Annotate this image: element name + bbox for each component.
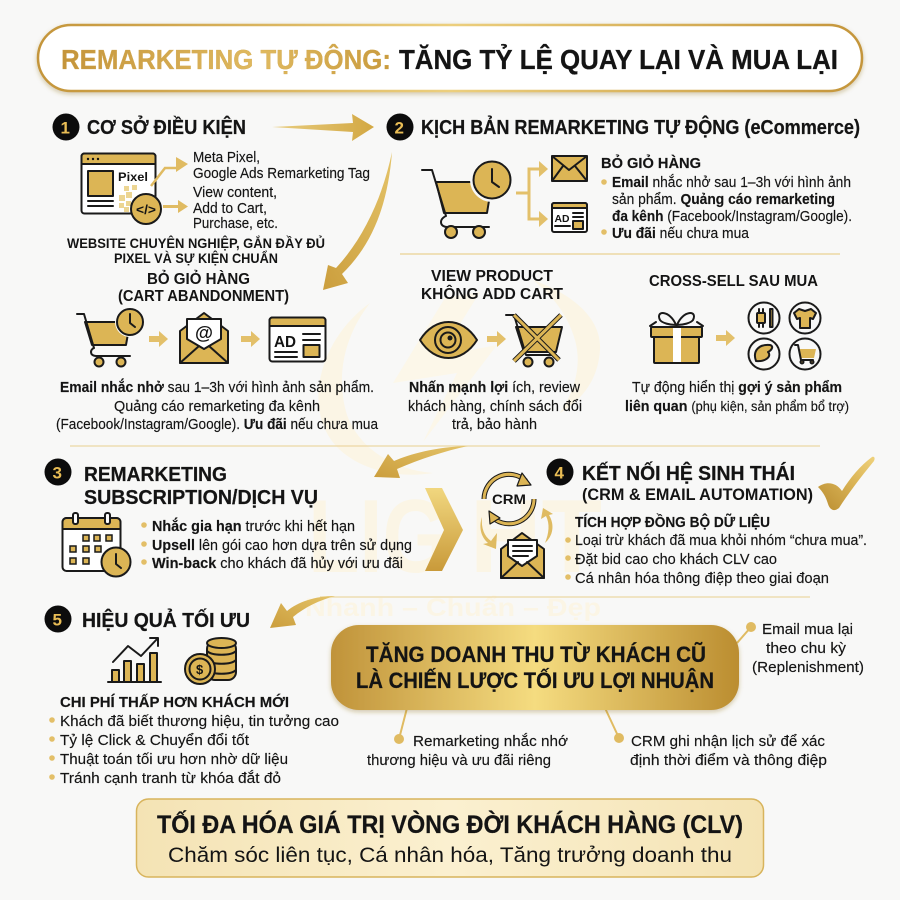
icon: CRM cycle [484, 473, 534, 524]
text: cart abandonment bullets: sản phẩm. Quảng cáo remarketing [612, 191, 835, 208]
arrow: pixel to meta tag [151, 168, 178, 186]
icon: cart with clock [77, 307, 145, 366]
icon: envelope [552, 156, 587, 181]
arrow: cart to email [149, 331, 168, 347]
section 1 heading: 1 [60, 118, 70, 138]
text: data integration bullets: Loại trừ khách đã mua khỏi nhóm “chưa mua”. [575, 532, 867, 549]
icon: gold check mark [818, 457, 875, 510]
footer banner: maximize CLV: TỐI ĐA HÓA GIÁ TRỊ VÒNG ĐỜI KHÁCH HÀNG (CLV) [157, 809, 743, 839]
arrow: step 1 to step 2 [272, 114, 374, 141]
section 4 heading: (CRM & EMAIL AUTOMATION) [582, 485, 813, 504]
text: lower cost bullets [49, 693, 339, 787]
arrow: gift to products [716, 330, 735, 346]
text: cart abandonment description: (Facebook/Instagram/Google). Ưu đãi nếu chưa mua [56, 416, 379, 433]
text: pixel tags: Meta Pixel, [193, 149, 260, 166]
arrow: email to ad [241, 331, 260, 347]
icon: growth chart [108, 638, 161, 682]
heading: view product: VIEW PRODUCT [431, 268, 554, 285]
text: cross-sell description: liên quan (phụ kiện, sản phẩm bổ trợ) [625, 398, 849, 415]
icon: small ad window [552, 203, 587, 232]
section 2 heading: 2 [394, 118, 404, 138]
icon: t-shirt [790, 302, 820, 334]
callout: CRM history: định thời điểm và thông điệp [630, 752, 827, 769]
icon: large cart with clock [422, 158, 514, 238]
text: cart abandonment description: Email nhắc nhở sau 1–3h với hình ảnh sản phẩm. [60, 378, 374, 396]
text: data integration bullets [565, 513, 867, 587]
section 1 heading [52, 114, 246, 140]
text: pixel tags: Google Ads Remarketing Tag [193, 165, 370, 182]
text: view product description: Nhấn mạnh lợi ích, review [409, 379, 580, 396]
icon: website with pixel: Pixel [118, 172, 148, 184]
icon: coins: $ [196, 662, 204, 677]
text: cart abandonment bullets: Ưu đãi nếu chưa mua [612, 225, 750, 242]
text: pixel tags: Add to Cart, [193, 200, 267, 217]
section 3 heading [44, 458, 318, 509]
text: lower cost bullets: CHI PHÍ THẤP HƠN KHÁCH MỚI [60, 693, 289, 711]
callout connectors [394, 622, 756, 744]
text: view product description: khách hàng, chính sách đổi [408, 398, 582, 415]
watermark logo: LIG [308, 479, 448, 595]
section 5 heading [44, 606, 250, 632]
title banner [38, 25, 862, 91]
footer banner: maximize CLV [136, 799, 764, 877]
icon: website with pixel: </> [136, 202, 156, 217]
text: data integration bullets: Cá nhân hóa thông điệp theo giai đoạn [575, 570, 829, 587]
heading: cross-sell: CROSS-SELL SAU MUA [649, 273, 818, 290]
callout: replenishment email: Email mua lại [762, 621, 853, 638]
arrow: envelope to CRM [541, 508, 553, 543]
section 4 heading: 4 [554, 464, 564, 482]
text: view product description [408, 379, 582, 433]
section 3 heading: SUBSCRIPTION/DỊCH VỤ [84, 486, 318, 509]
section 4 heading [546, 458, 813, 504]
title banner: TĂNG TỶ LỆ QUAY LẠI VÀ MUA LẠI [399, 43, 838, 75]
icon: accessory [748, 338, 780, 370]
callout banner: revenue from existing customers: LÀ CHIẾN LƯỢC TỐI ƯU LỢI NHUẬN [356, 667, 714, 693]
heading: cart abandonment: BỎ GIỎ HÀNG [147, 270, 250, 288]
logo chevron [425, 488, 463, 571]
callout: CRM history [630, 733, 827, 769]
text: website caption: PIXEL VÀ SỰ KIỆN CHUẨN [114, 251, 278, 266]
watermark logo: HT [470, 479, 602, 595]
text: cart abandonment bullets: đa kênh (Facebook/Instagram/Google). [612, 208, 852, 225]
callout: remarketing reminder [367, 733, 568, 769]
section 3 heading: 3 [52, 464, 62, 482]
text: lower cost bullets: Tránh cạnh tranh từ khóa đắt đỏ [60, 770, 281, 787]
text: cart abandonment description: Quảng cáo remarketing đa kênh [114, 398, 320, 415]
icon: small ad window: AD [554, 213, 570, 225]
watermark logo: Nhanh – Chuẩn – Đẹp [305, 594, 601, 622]
text: subscription bullets: Nhắc gia hạn trước khi hết hạn [152, 517, 355, 535]
callout: replenishment email: theo chu kỳ [766, 640, 847, 657]
callout banner: revenue from existing customers: TĂNG DOANH THU TỪ KHÁCH CŨ [366, 642, 706, 667]
text: cross-sell description: Tự động hiển thị gợi ý sản phẩm [632, 379, 842, 396]
text: lower cost bullets: Khách đã biết thương hiệu, tin tưởng cao [60, 713, 339, 730]
text: cart abandonment description [56, 378, 379, 433]
text: cross-sell description [625, 379, 849, 415]
title banner: REMARKETING TỰ ĐỘNG: [61, 43, 391, 75]
text: website caption [67, 236, 325, 266]
heading: view product: KHÔNG ADD CART [421, 285, 564, 303]
icon: CRM cycle: CRM [492, 492, 526, 507]
heading: cart abandonment: (CART ABANDONMENT) [118, 288, 289, 305]
callout banner: revenue from existing customers [331, 625, 739, 710]
watermark logo [305, 280, 602, 622]
arrow head: pixel to meta tag [176, 157, 188, 172]
text: lower cost bullets: Tỷ lệ Click & Chuyển đổi tốt [60, 732, 250, 749]
curved arrow: step 4 to step 3 [374, 446, 468, 478]
text: cart abandonment bullets [601, 154, 852, 242]
footer banner: maximize CLV: Chăm sóc liên tục, Cá nhân hóa, Tăng trưởng doanh thu [168, 844, 732, 867]
icon: envelope with document [501, 533, 544, 578]
arrow: eye to crossed cart [487, 331, 506, 347]
connector: cart to channels [516, 161, 548, 227]
section 4 heading: KẾT NỐI HỆ SINH THÁI [582, 461, 795, 485]
section 5 heading: 5 [52, 610, 62, 630]
callout: CRM history: CRM ghi nhận lịch sử để xác [631, 733, 825, 750]
arrow: CRM to envelope [480, 517, 497, 549]
text: cart abandonment bullets: Email nhắc nhở sau 1–3h với hình ảnh [612, 174, 851, 191]
icon: ad window [270, 318, 326, 362]
text: lower cost bullets: Thuật toán tối ưu hơn nhờ dữ liệu [60, 751, 288, 768]
text: website caption: WEBSITE CHUYÊN NGHIỆP, GẮN ĐẦY ĐỦ [67, 236, 325, 251]
icon: calendar with clock [62, 513, 130, 576]
icon: watch and accessory [748, 302, 780, 334]
icon: open envelope [180, 313, 228, 363]
icon: website with pixel [82, 154, 161, 224]
callout: remarketing reminder: thương hiệu và ưu đãi riêng [367, 752, 551, 769]
section 3 heading: REMARKETING [84, 463, 227, 486]
text: subscription bullets: Upsell lên gói cao hơn dựa trên sử dụng [152, 537, 412, 554]
callout: replenishment email: (Replenishment) [752, 659, 864, 676]
section 1 heading: CƠ SỞ ĐIỀU KIỆN [87, 115, 246, 139]
icon: small cart [790, 338, 820, 370]
text: pixel tags [193, 149, 370, 232]
heading: view product [421, 268, 564, 303]
curved arrow: to step 5 [270, 596, 335, 628]
text: view product description: trả, bảo hành [452, 416, 537, 433]
text: data integration bullets: TÍCH HỢP ĐỒNG BỘ DỮ LIỆU [575, 513, 770, 531]
icon: crossed-out cart [506, 315, 562, 366]
text: cart abandonment bullets: BỎ GIỎ HÀNG [601, 154, 701, 172]
icon: coins [185, 638, 236, 684]
text: pixel tags: Purchase, etc. [193, 215, 278, 232]
arrow: code to events [163, 200, 188, 213]
icon: open envelope: @ [195, 323, 213, 343]
text: pixel tags: View content, [193, 184, 277, 201]
heading: cart abandonment [118, 270, 289, 305]
icon: ad window: AD [274, 334, 296, 351]
callout: replenishment email [752, 621, 864, 676]
text: data integration bullets: Đặt bid cao cho khách CLV cao [575, 551, 777, 568]
icon: eye [420, 322, 477, 358]
text: subscription bullets: Win-back cho khách đã hủy với ưu đãi [152, 555, 403, 572]
section 5 heading: HIỆU QUẢ TỐI ƯU [82, 608, 250, 632]
icon: gift [650, 313, 703, 363]
callout: remarketing reminder: Remarketing nhắc nhớ [413, 733, 568, 750]
curved arrow: step 2 to cart abandonment [323, 152, 392, 290]
text: subscription bullets [141, 517, 412, 572]
